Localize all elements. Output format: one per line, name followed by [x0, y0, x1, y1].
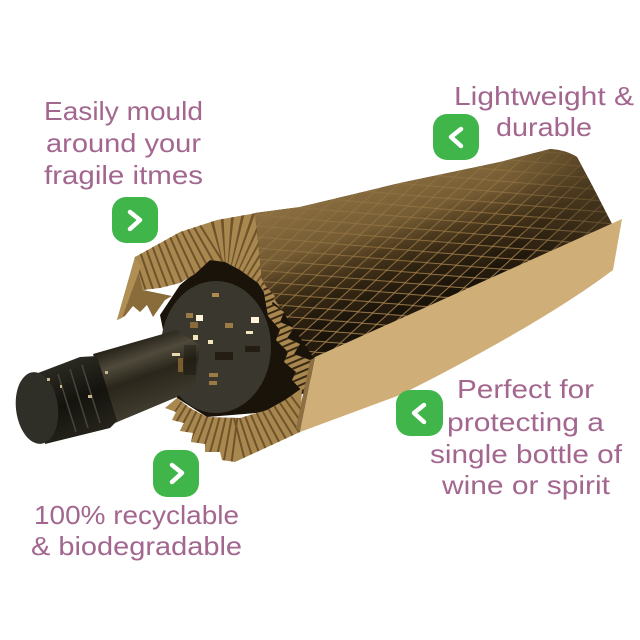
left sleeve flap [117, 257, 172, 320]
tan cardboard strip [300, 219, 622, 432]
callout: easily mould: Easily mould [44, 96, 203, 126]
lower pleated fringe [165, 389, 302, 462]
infographic canvas [16, 86, 634, 560]
callout: easily mould: around your [46, 128, 201, 158]
left flap light edge [117, 257, 141, 320]
strip end edge [296, 357, 315, 432]
callout: perfect for a single bottle [430, 374, 623, 500]
icon: left chevron button, lower right [396, 390, 443, 436]
callout: recyclable and biodegradable [31, 500, 242, 561]
glass reflections and paper flecks [172, 293, 260, 385]
honeycomb body [255, 149, 612, 358]
bottle shoulder [161, 281, 271, 413]
icon: right chevron button, lower left [153, 450, 199, 497]
callout: lightweight and durable [454, 81, 634, 142]
right pleats beside the bottle [262, 282, 315, 392]
callout: perfect for a single bottle: wine or spirit [441, 470, 611, 500]
bottle screw cap [12, 356, 117, 446]
callout: easily mould [44, 96, 203, 190]
top pleated fringe [135, 212, 280, 308]
callout: lightweight and durable: Lightweight & [454, 81, 634, 111]
callout: perfect for a single bottle: protecting a [447, 407, 605, 437]
callout: recyclable and biodegradable: & biodegradable [31, 531, 242, 561]
icon: right chevron button, top left [112, 197, 158, 243]
bottle neck [93, 330, 200, 423]
honeycomb paper sleeve with bottle [12, 140, 622, 465]
callout: perfect for a single bottle: Perfect for [457, 374, 594, 404]
sleeve dark interior [160, 260, 318, 417]
callout: lightweight and durable: durable [496, 112, 592, 142]
icon: left chevron button, top right [433, 114, 479, 160]
callout: perfect for a single bottle: single bottle of [430, 439, 623, 469]
callout: recyclable and biodegradable: 100% recyclable [34, 500, 239, 530]
callout: easily mould: fragile itmes [44, 160, 203, 190]
